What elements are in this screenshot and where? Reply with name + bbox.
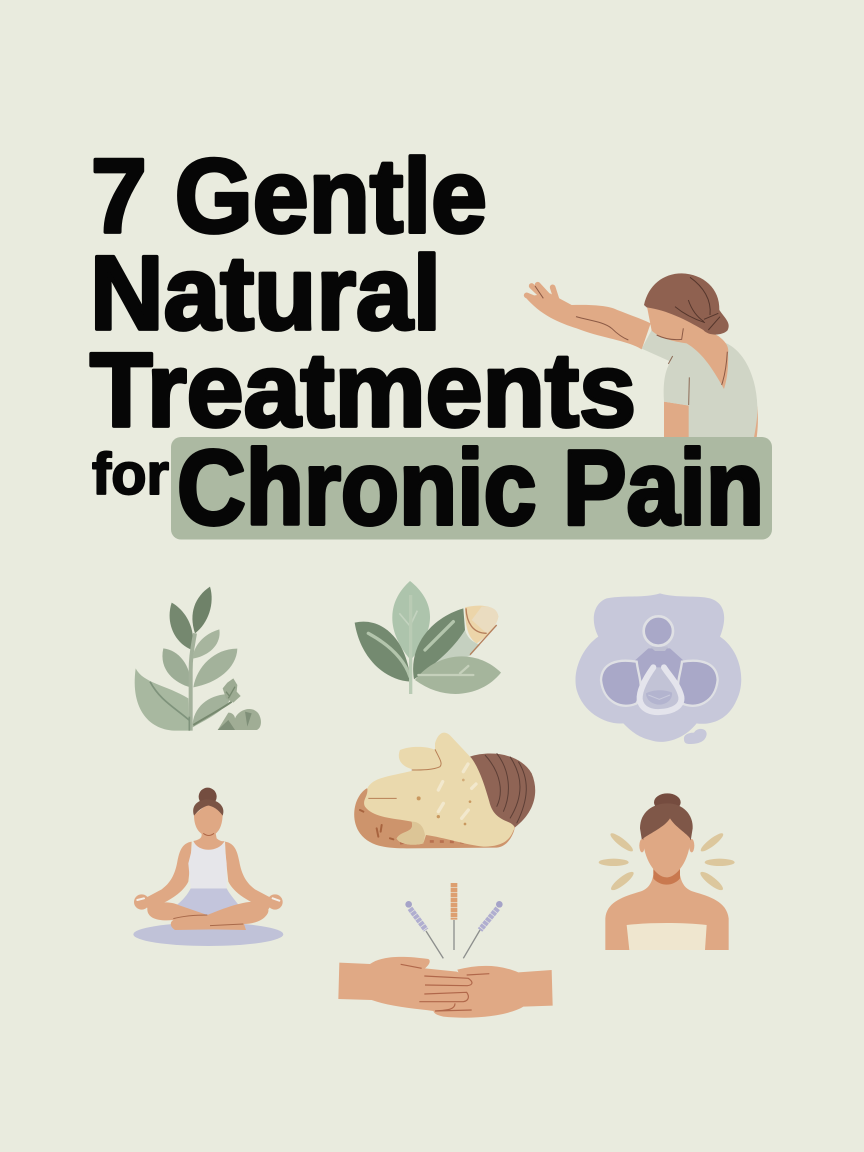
- relief rays: [599, 831, 735, 893]
- title highlight bar: [171, 437, 772, 540]
- title: [90, 139, 764, 547]
- acupuncture hands: [338, 957, 553, 1018]
- icon: acupuncture needles and hands: [338, 883, 553, 1018]
- icon: meditating woman: [133, 788, 283, 946]
- icon: hand with scrub: [354, 733, 535, 848]
- title line 1: 7 Gentle: [91, 139, 487, 255]
- title word: for: for: [92, 442, 169, 507]
- icon: ginger and leaves: [355, 581, 501, 694]
- illustration: person raising arm: [525, 273, 758, 437]
- acupuncture needles: [405, 883, 503, 958]
- icon: herbal plant: [135, 587, 261, 731]
- title line 2: Natural: [90, 236, 441, 352]
- title line 4: Chronic Pain: [177, 429, 764, 547]
- icon: meditation thought cloud: [575, 593, 741, 744]
- title line 3: Treatments: [90, 333, 636, 449]
- icon: woman with neck relief: [599, 793, 735, 950]
